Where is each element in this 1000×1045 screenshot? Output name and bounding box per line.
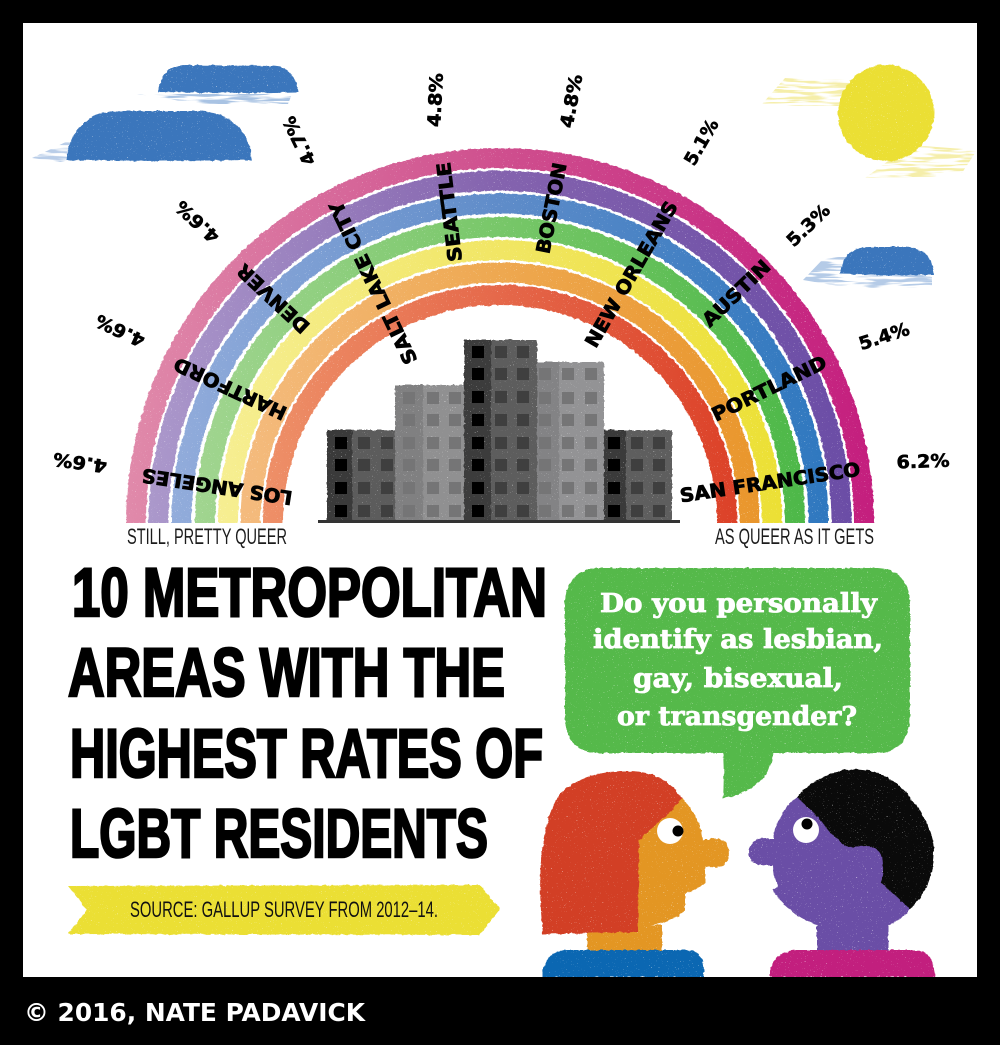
city label: Denver: DENVER xyxy=(233,259,314,337)
title: AREAS WITH THE xyxy=(68,634,505,711)
icon: sun xyxy=(762,65,977,178)
question text xyxy=(593,589,883,732)
city label: San Francisco: SAN FRANCISCO xyxy=(679,459,862,507)
figure: woman xyxy=(540,771,730,977)
city label: Salt Lake City: SALT LAKE CITY xyxy=(325,197,422,368)
question text: gay, bisexual, xyxy=(633,664,843,694)
rainbow arc xyxy=(136,158,864,530)
question text: Do you personally xyxy=(600,589,878,619)
question text: identify as lesbian, xyxy=(593,625,883,655)
icon: cloud right xyxy=(803,247,934,288)
windows: right dark building xyxy=(608,437,665,517)
buildings illustration xyxy=(318,340,680,523)
footer credit: © 2016, NATE PADAVICK xyxy=(24,998,367,1027)
speech bubble xyxy=(565,568,910,798)
windows: second building xyxy=(403,392,461,517)
question text: or transgender? xyxy=(617,702,857,732)
title: LGBT RESIDENTS xyxy=(70,795,488,872)
city label: Los Angeles: LOS ANGELES xyxy=(140,464,294,508)
percent: Seattle: 4.8% xyxy=(424,73,448,128)
figure: man xyxy=(748,769,935,977)
percent: Los Angeles: 4.6% xyxy=(52,448,108,476)
title xyxy=(68,554,547,872)
source ribbon xyxy=(68,885,500,935)
percent: San Francisco: 6.2% xyxy=(896,451,950,473)
scale label: right: AS QUEER AS IT GETS xyxy=(715,524,874,549)
title: 10 METROPOLITAN xyxy=(72,554,547,631)
city label: Austin: AUSTIN xyxy=(698,256,775,332)
percent: Austin: 5.3% xyxy=(783,200,835,251)
icon: clouds top left xyxy=(32,65,298,162)
percent: Portland: 5.4% xyxy=(856,319,912,355)
scale label: left: STILL, PRETTY QUEER xyxy=(127,524,287,549)
windows: left dark building xyxy=(335,437,393,517)
title: HIGHEST RATES OF xyxy=(70,715,543,792)
city label: Boston: BOSTON xyxy=(532,161,572,255)
percent: Hartford: 4.6% xyxy=(92,310,148,351)
city label: Portland: PORTLAND xyxy=(708,352,830,426)
city label: Hartford: HARTFORD xyxy=(170,352,290,424)
city label: Seattle: SEATTLE xyxy=(433,161,467,263)
windows: centre tower xyxy=(472,346,529,517)
percent: Denver: 4.6% xyxy=(172,196,224,247)
source ribbon: SOURCE: GALLUP SURVEY FROM 2012–14. xyxy=(130,897,438,922)
windows: fourth building xyxy=(539,368,597,517)
city label: New Orleans: NEW ORLEANS xyxy=(581,198,683,351)
percent: Boston: 4.8% xyxy=(557,73,587,130)
percent: Salt Lake City: 4.7% xyxy=(279,113,321,169)
percent: New Orleans: 5.1% xyxy=(680,116,723,169)
